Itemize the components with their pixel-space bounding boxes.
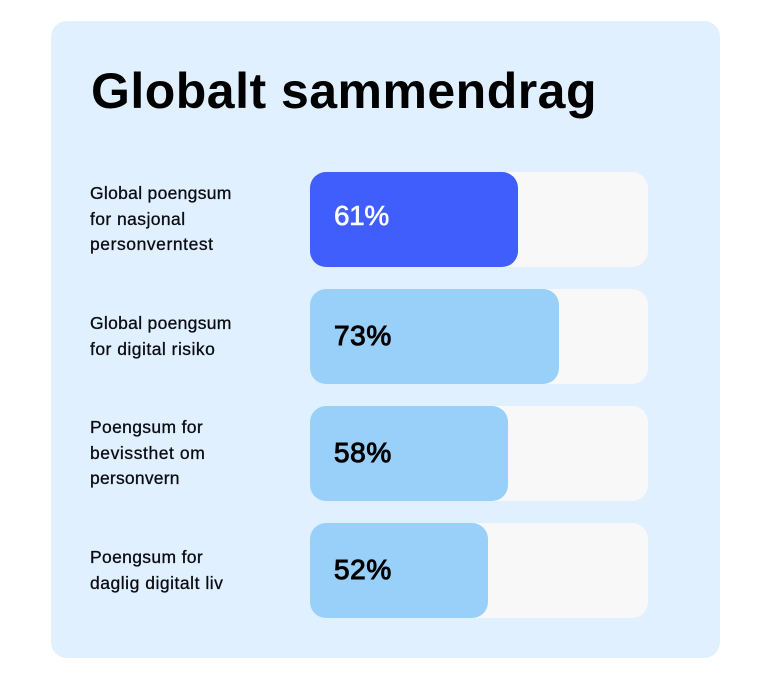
bar: 52% [310,523,648,618]
label: national privacy test [90,183,232,254]
label: digital risk: Global poengsum [90,313,232,333]
label: national privacy test: Global poengsum [90,183,232,203]
bar: 73%: 73% [334,320,392,351]
label: digital risk: for digital risiko [90,338,215,358]
label: national privacy test: personverntest [90,234,214,254]
bar: 61%: 61% [334,200,389,231]
label: national privacy test: for nasjonal [90,208,186,228]
label: privacy awareness [90,417,205,488]
label: privacy awareness: Poengsum for [90,417,203,437]
label: privacy awareness: personvern [90,468,180,488]
bar: 58%: 58% [334,437,392,468]
bar: 61% [310,172,648,267]
label: daily digital life: daglig digitalt liv [90,572,223,592]
bar: 73% [310,289,648,384]
bar: 58% [310,406,648,501]
bar: 52%: 52% [334,554,392,585]
label: daily digital life: Poengsum for [90,547,203,567]
title: Globalt sammendrag [91,63,597,119]
label: digital risk [90,313,232,359]
label: daily digital life [90,547,223,593]
label: privacy awareness: bevissthet om [90,442,205,462]
